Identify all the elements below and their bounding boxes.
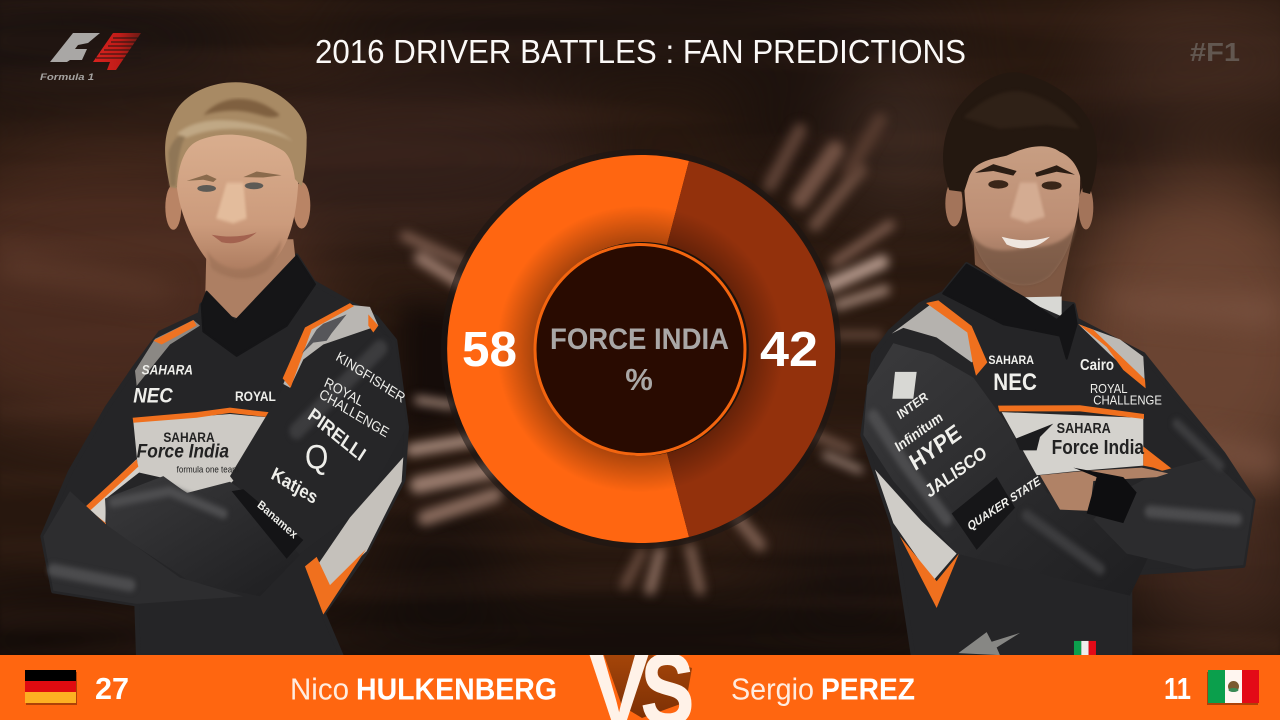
face [964, 136, 1080, 285]
INTER icon [892, 372, 917, 399]
sponsor lettering: SAHARA [1057, 420, 1111, 436]
eyes [988, 180, 1008, 189]
lower left panels [875, 469, 957, 580]
ears [165, 185, 181, 230]
shaded jaw [207, 239, 282, 279]
sponsor lettering: KINGFISHER [334, 349, 408, 406]
sleeve highlights [53, 348, 380, 585]
smile [1002, 237, 1050, 248]
mouth [212, 232, 257, 243]
chest white panel [133, 414, 273, 497]
suit silhouette [863, 265, 1253, 657]
sponsor lettering: SAHARA [163, 430, 215, 445]
sponsor lettering: HYPE [905, 419, 965, 476]
sleeve flag [1074, 641, 1096, 655]
undershirt collar [1023, 297, 1062, 316]
value 58: 58 [462, 323, 517, 377]
lower right panels [317, 457, 403, 587]
hair highlight [963, 91, 1080, 129]
beard shadow [968, 225, 1077, 285]
neck [973, 232, 1073, 299]
sponsor lettering: QUAKER STATE [966, 475, 1043, 533]
nose [216, 183, 247, 223]
sponsor lettering: JALISCO [921, 442, 990, 502]
right side panel [1143, 447, 1185, 479]
sponsor lettering: Infinitum [892, 409, 945, 455]
patch [952, 477, 1015, 550]
Hulkenberg number: 27 [95, 671, 129, 706]
sponsor lettering: PIRELLI [304, 403, 370, 465]
sponsor lettering: SAHARA [988, 355, 1034, 367]
bottom bar [0, 655, 1280, 720]
hair highlight [177, 120, 293, 141]
centre disc [535, 244, 745, 454]
sponsor lettering: Banamex [255, 499, 300, 542]
hand [1040, 468, 1168, 511]
driver portrait: Nico Hulkenberg [43, 82, 408, 657]
big sleeve [863, 343, 1150, 596]
Perez name: PEREZ [821, 672, 915, 706]
inner shadow on ring [447, 155, 835, 543]
hashtag: #F1 [1190, 37, 1240, 67]
value 42: 42 [760, 323, 818, 377]
chest eye mark [1015, 424, 1053, 450]
title: 2016 DRIVER BATTLES : FAN PREDICTIONS [315, 33, 966, 70]
sponsor lettering: ROYAL [235, 388, 276, 404]
chest white panel [1002, 412, 1143, 475]
Perez number: 11 [1164, 671, 1191, 706]
sponsor lettering [133, 349, 408, 542]
sponsor lettering: SAHARA [142, 362, 193, 378]
right arm sleeve [1093, 458, 1253, 569]
sponsor lettering: INTER [895, 389, 930, 422]
shoulder left panel [892, 305, 980, 362]
head [943, 72, 1097, 285]
driver portrait: Sergio Perez [863, 72, 1253, 657]
nose [1010, 182, 1045, 223]
logo: F [50, 33, 100, 62]
brows [975, 164, 1017, 176]
flag: Mexico [1207, 670, 1259, 705]
suit silhouette [43, 256, 407, 657]
f1 logo [40, 33, 141, 83]
sponsor lettering: ROYAL [322, 374, 366, 410]
sponsor lettering: CHALLENGE [1093, 393, 1162, 408]
sleeve highlights [873, 416, 1237, 569]
brows [187, 175, 217, 182]
head [165, 82, 310, 279]
shoulder left panel [135, 320, 200, 386]
left elbow panel [83, 459, 139, 527]
segment: Perez 42 [667, 161, 835, 537]
logo: red 1 [93, 33, 141, 70]
sponsor lettering: Q [305, 438, 328, 476]
eyes [197, 185, 216, 192]
flag: Germany [25, 670, 77, 705]
ears [945, 181, 963, 226]
neck [205, 239, 297, 318]
sponsor lettering: CHALLENGE [317, 386, 391, 441]
sponsor lettering: Katjes [268, 463, 321, 508]
star logo [302, 314, 347, 354]
hair shadow [203, 99, 280, 117]
collar [202, 256, 315, 356]
sponsor lettering: NEC [993, 369, 1037, 395]
front sleeve [105, 476, 300, 596]
badge patch [232, 489, 303, 559]
glove cuff [1073, 468, 1137, 523]
sponsor lettering [892, 355, 1162, 533]
hair side shade [168, 134, 187, 187]
collar [943, 265, 1077, 359]
sponsor lettering: Force India [137, 439, 229, 462]
shoulder right panel [1078, 324, 1145, 385]
percent sign: % [625, 362, 653, 397]
sponsor lettering: Cairo [1080, 357, 1114, 374]
donut chart: Force India [444, 152, 838, 546]
chest orange stripe [998, 405, 1144, 419]
hair [943, 72, 1097, 194]
Hulkenberg name: HULKENBERG [356, 672, 557, 706]
Perez name [731, 672, 915, 706]
sponsor lettering: Force India [1052, 436, 1145, 458]
shoulder right panel [283, 305, 378, 388]
donut halo [444, 152, 838, 546]
upper right arm [230, 329, 407, 559]
face [175, 124, 299, 278]
hair [165, 82, 307, 188]
Perez name: Sergio [731, 672, 814, 706]
segment: Hulkenberg 58 [447, 155, 689, 543]
Hulkenberg name: Nico [290, 672, 349, 706]
sponsor lettering: ROYAL [1090, 381, 1128, 396]
sponsor lettering: formula one team [177, 464, 239, 474]
star mark [958, 632, 1020, 655]
chest orange stripe [133, 408, 275, 423]
versus mark [590, 655, 692, 720]
centre label: FORCE INDIA [550, 323, 729, 356]
sponsor lettering: NEC [133, 385, 173, 408]
logo wordmark: Formula 1 [40, 72, 94, 83]
